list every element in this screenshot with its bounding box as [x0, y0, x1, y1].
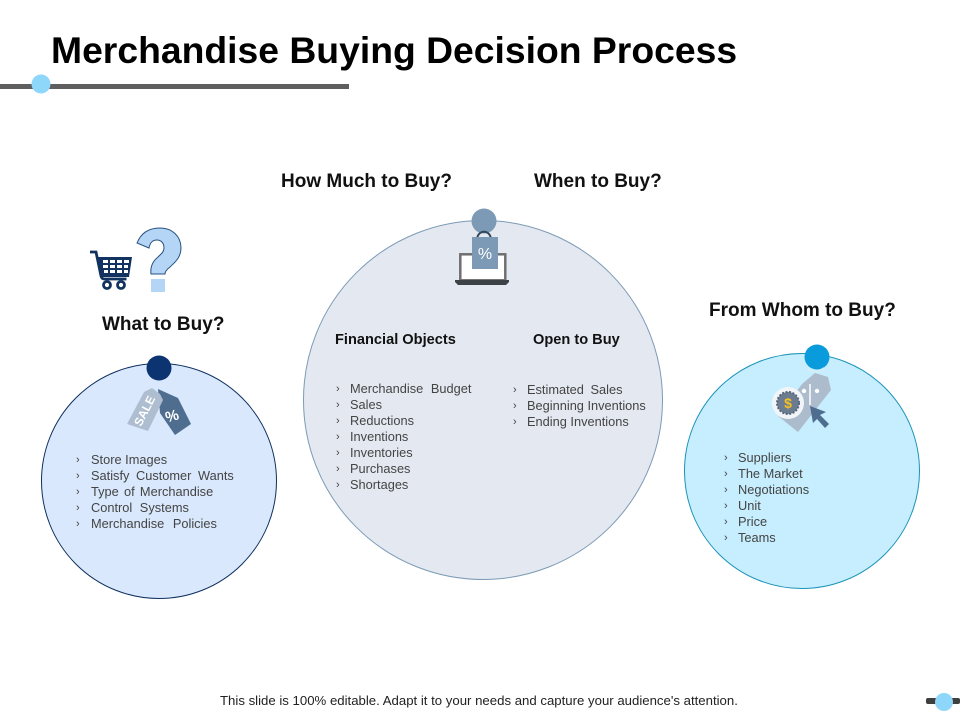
text: Type of Merchandise	[91, 484, 213, 499]
text: Price	[738, 514, 767, 529]
text: Shortages	[350, 477, 408, 492]
text: ›	[724, 452, 728, 464]
text: ›	[724, 484, 728, 496]
text: Store Images	[91, 452, 167, 467]
text: ›	[724, 468, 728, 480]
text: Negotiations	[738, 482, 809, 497]
icon: left node dot and sale tags: SALE	[131, 393, 158, 428]
list: open to buy	[513, 382, 646, 429]
text: ›	[513, 384, 517, 396]
text: ›	[76, 486, 80, 498]
heading: from whom to buy: From Whom to Buy?	[709, 300, 896, 321]
text: Satisfy Customer Wants	[91, 468, 234, 483]
text: Inventions	[350, 429, 408, 444]
icon: question mark	[136, 228, 182, 292]
footer text: This slide is 100% editable. Adapt it to your needs and capture your audience's attention.	[220, 693, 738, 708]
text: ›	[336, 383, 340, 395]
text: Merchandise Budget	[350, 381, 471, 396]
text: ›	[336, 431, 340, 443]
text: Reductions	[350, 413, 414, 428]
footer slider icon	[926, 693, 960, 711]
icon: right node dot, tag, coin and cursor	[772, 344, 831, 432]
text: ›	[724, 500, 728, 512]
title: Merchandise Buying Decision Process	[51, 29, 737, 71]
subheading: financial objects: Financial Objects	[335, 332, 456, 348]
subheading: open to buy: Open to Buy	[533, 332, 620, 348]
text: ›	[336, 447, 340, 459]
text: ›	[513, 416, 517, 428]
text: Inventories	[350, 445, 413, 460]
text: The Market	[738, 466, 803, 481]
text: Purchases	[350, 461, 410, 476]
text: ›	[76, 470, 80, 482]
text: Ending Inventions	[527, 414, 629, 429]
text: ›	[76, 454, 80, 466]
text: Teams	[738, 530, 776, 545]
icon: shopping cart	[90, 250, 132, 290]
text: Estimated Sales	[527, 382, 622, 397]
text: ›	[336, 399, 340, 411]
text: Control Systems	[91, 500, 189, 515]
text: Unit	[738, 498, 761, 513]
text: ›	[724, 532, 728, 544]
text: Beginning Inventions	[527, 398, 646, 413]
icon: left node dot and sale tags: %	[163, 406, 181, 426]
list: what to buy	[76, 452, 234, 531]
text: ›	[76, 502, 80, 514]
text: Merchandise Policies	[91, 516, 217, 531]
panel: left circle	[41, 364, 277, 599]
icon: left node dot and sale tags	[127, 356, 191, 435]
icon: centre node dot and laptop with bag	[455, 208, 509, 285]
text: ›	[724, 516, 728, 528]
icon: centre node dot and laptop with bag: %	[478, 246, 492, 263]
list: from whom to buy	[724, 450, 809, 545]
title underline with dot	[0, 74, 349, 94]
text: ›	[336, 479, 340, 491]
text: ›	[336, 463, 340, 475]
text: ›	[76, 518, 80, 530]
text: ›	[336, 415, 340, 427]
list: financial objects	[336, 381, 472, 492]
text: Sales	[350, 397, 382, 412]
panel: right circle	[684, 353, 920, 589]
heading: when to buy: When to Buy?	[534, 171, 662, 192]
heading: how much to buy: How Much to Buy?	[281, 171, 452, 192]
heading: what to buy: What to Buy?	[102, 314, 224, 335]
icon: right node dot, tag, coin and cursor: $	[784, 395, 792, 411]
panel: centre circle	[303, 220, 663, 580]
text: Suppliers	[738, 450, 791, 465]
text: ›	[513, 400, 517, 412]
